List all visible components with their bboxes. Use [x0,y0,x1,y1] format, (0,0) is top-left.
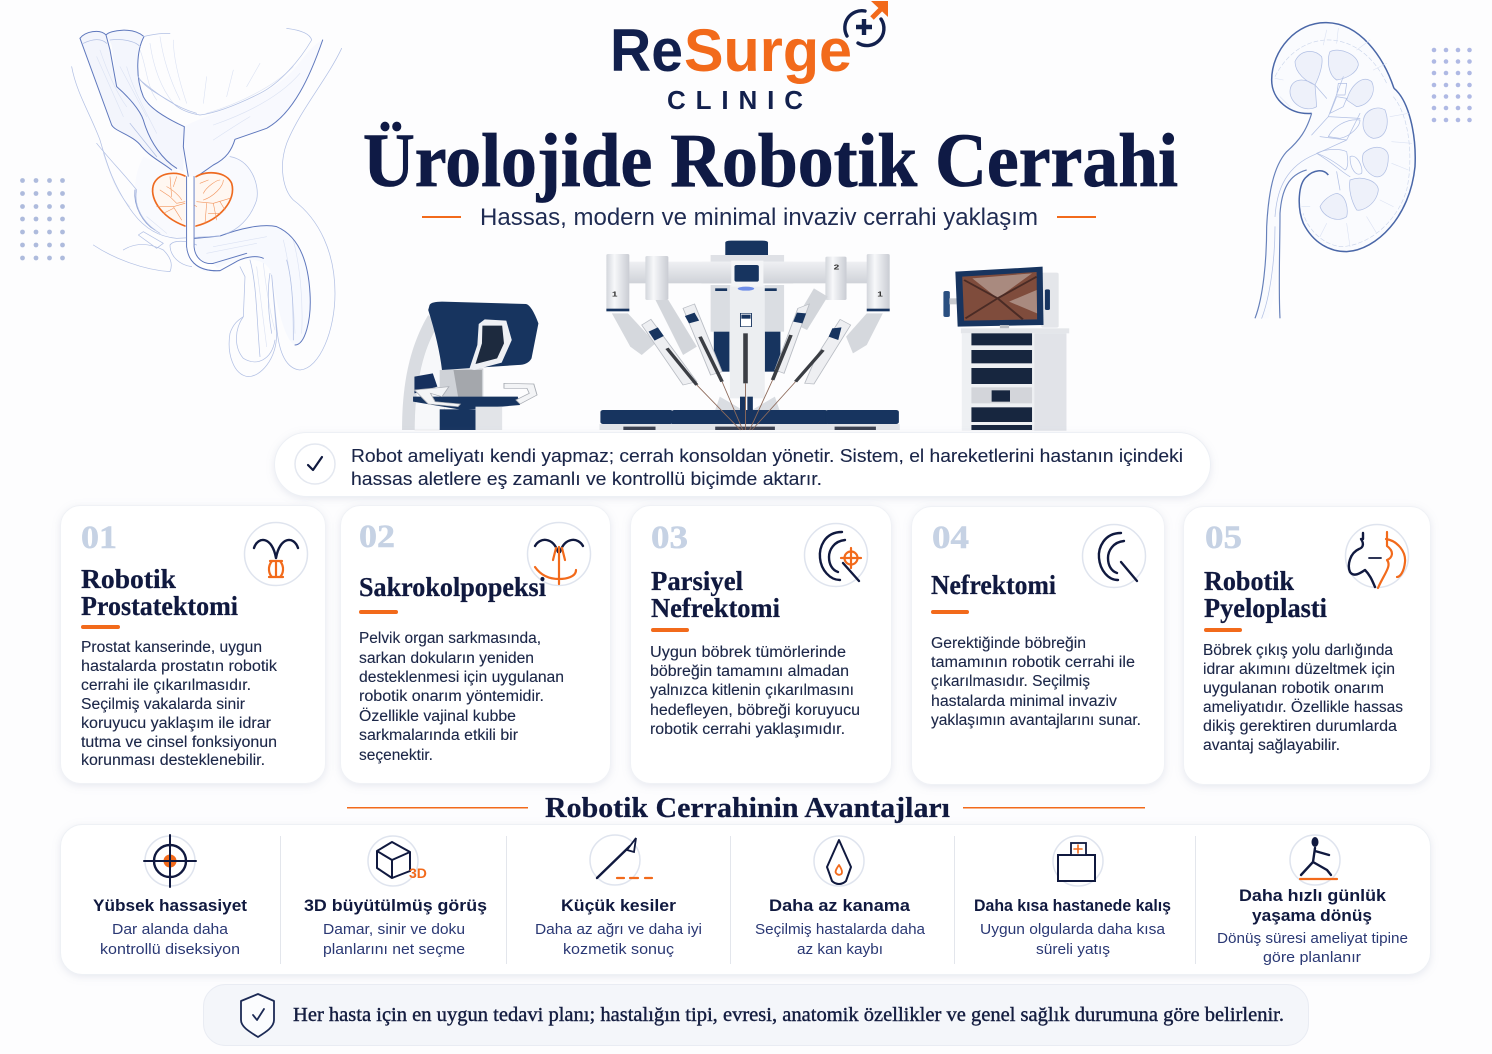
logo: ReSurge Clinic: CLINIC [667,85,803,115]
panel: card 02 Sakrokolpopeksi: sarkan dokuların yeniden [359,650,534,667]
panel: card 01 Robotik Prostatektomi: tutma ve cinsel fonksiyonun [81,734,277,751]
panel: card 05 Robotik Pyeloplasti: idrar akımını düzeltmek için [1203,661,1395,678]
footer callout: treatment plan: Her hasta için en uygun tedavi planı; hastalığın tipi, evresi, anatomik özellikler ve genel sağlık durumuna göre belirlenir. [293,1004,1284,1026]
panel: card 01 Robotik Prostatektomi: Robotik [81,564,176,594]
panel: card 05 Robotik Pyeloplasti: Pyeloplasti [1204,593,1327,623]
panel: card 04 Nefrektomi: Gerektiğinde böbreğin [931,635,1086,652]
panel: card 03 Parsiyel Nefrektomi: hedefleyen, böbreği koruyucu [650,702,860,719]
panel: card 05 Robotik Pyeloplasti: ameliyatıdır. Özellikle hassas [1203,698,1403,716]
advantage: 3D view: 3D büyütülmüş görüş [304,896,487,915]
panel: card 05 Robotik Pyeloplasti [1184,506,1430,784]
advantage: faster return to daily life: göre planlanır [1263,949,1361,966]
panel: card 04 Nefrektomi: hastalarda minimal invaziv [931,693,1117,710]
panel: card 03 Parsiyel Nefrektomi: Nefrektomi [651,593,780,623]
panel: card 03 Parsiyel Nefrektomi: yalnızca kitlenin çıkarılmasını [650,682,854,699]
title: Ürolojide Robotik Cerrahi [363,119,1178,203]
decoration: left dot grid [20,178,65,260]
advantage: faster return to daily life: Daha hızlı günlük [1239,886,1387,905]
panel: card 04 Nefrektomi: Nefrektomi [931,570,1056,600]
logo: ReSurge Clinic: Re [610,17,683,84]
advantage: faster return to daily life [1217,835,1408,966]
advantage: less bleeding: Daha az kanama [769,896,911,915]
panel: card 03 Parsiyel Nefrektomi: 03 [651,520,688,556]
heading: advantages: Robotik Cerrahinin Avantajları [545,792,950,824]
panel: card 03 Parsiyel Nefrektomi: Uygun böbrek tümörlerinde [650,644,846,661]
advantage: less bleeding: Seçilmiş hastalarda daha [755,921,926,938]
panel: card 01 Robotik Prostatektomi: Prostatektomi [81,591,238,621]
panel: card 05 Robotik Pyeloplasti: avantaj sağlayabilir. [1203,737,1340,754]
logo: ReSurge Clinic [610,1,888,115]
illustration: prostate anatomy [72,28,342,377]
advantage: shorter hospital stay: süreli yatış [1036,941,1110,958]
callout: surgeon controls the robot: Robot ameliyatı kendi yapmaz; cerrah konsoldan yönetir. Sistem, el hareketlerini hastanın içindeki [351,445,1183,466]
advantage: high precision: Yübsek hassasiyet [93,896,247,915]
callout: surgeon controls the robot [274,432,1210,496]
icon: kidney [1082,524,1146,588]
advantage: small incisions: kozmetik sonuç [563,941,675,958]
panel: card 05 Robotik Pyeloplasti: Robotik [1204,566,1294,596]
panel: card 01 Robotik Prostatektomi: Prostat kanserinde, uygun [81,639,262,656]
advantage: shorter hospital stay: Daha kısa hastanede kalış [974,896,1171,915]
icon: prostate [244,522,308,586]
icon: partial kidney target [804,524,868,586]
panel: card 02 Sakrokolpopeksi: seçenektir. [359,747,433,764]
decoration: right dot grid [1432,48,1472,122]
advantage: faster return to daily life: Dönüş süresi ameliyat tipine [1217,930,1408,947]
panel: card 01 Robotik Prostatektomi: cerrahi ile çıkarılmasıdır. [81,677,251,694]
illustration: kidney anatomy [1255,23,1415,318]
panel: card 02 Sakrokolpopeksi: sarkmalarında etkili bir [359,727,518,744]
panel: card 01 Robotik Prostatektomi: 01 [81,520,117,556]
panel: card 03 Parsiyel Nefrektomi: böbreğin tamamını almadan [650,663,849,680]
panel: card 05 Robotik Pyeloplasti: Böbrek çıkış yolu darlığında [1203,642,1393,659]
panel: card 02 Sakrokolpopeksi: Sakrokolpopeksi [359,572,546,602]
callout: surgeon controls the robot: hassas aletlere eş zamanlı ve kontrollü biçimde aktarır. [351,468,822,489]
robot: patient cart with arms: 1 [877,290,883,298]
advantage: high precision [93,835,247,958]
advantage: high precision: kontrollü diseksiyon [100,941,240,958]
panel: card 02 Sakrokolpopeksi [340,506,610,784]
panel: card 01 Robotik Prostatektomi: korunması desteklenebilir. [81,752,265,769]
advantage: small incisions: Daha az ağrı ve daha iyi [535,921,702,938]
icon: ureter repair [1346,524,1408,588]
logo: ReSurge Clinic: Surge [684,17,852,84]
robot: surgeon console [402,302,538,430]
robot: patient cart with arms: 2 [834,263,839,271]
advantage: shorter hospital stay [974,836,1171,958]
advantage: high precision: Dar alanda daha [112,921,229,938]
advantage: less bleeding [755,836,926,958]
advantage: small incisions: Küçük kesiler [561,896,676,915]
advantage: 3D view: 3D [409,865,427,881]
panel: card 04 Nefrektomi: 04 [932,520,969,556]
panel: card 04 Nefrektomi: tamamının robotik cerrahi ile [931,654,1135,671]
advantage: faster return to daily life: yaşama dönüş [1252,906,1372,925]
panel: card 02 Sakrokolpopeksi: desteklenmesi için uygulanan [359,669,564,686]
panel: card 01 Robotik Prostatektomi: Seçilmiş vakalarda sinir [81,696,245,713]
panel: card 03 Parsiyel Nefrektomi [630,506,892,784]
advantage: 3D view: planlarını net seçme [323,941,465,958]
advantage: shorter hospital stay: Uygun olgularda daha kısa [980,921,1166,938]
panel: card 01 Robotik Prostatektomi: koruyucu yaklaşım ile idrar [81,715,271,732]
panel: card 02 Sakrokolpopeksi: 02 [359,519,395,555]
footer callout: treatment plan [204,984,1308,1046]
panel: card 01 Robotik Prostatektomi [60,506,326,784]
advantage: 3D view [304,836,487,958]
panel: card 02 Sakrokolpopeksi: robotik onarım yöntemidir. [359,688,544,705]
panel: card 04 Nefrektomi: çıkarılmasıdır. Seçilmiş [931,673,1090,690]
panel: card 04 Nefrektomi [912,506,1164,784]
panel: card 04 Nefrektomi: yaklaşımın avantajlarını sunar. [931,712,1141,729]
icon: pelvic support [528,522,590,586]
panel: card 02 Sakrokolpopeksi: Özellikle vajinal kubbe [359,707,516,725]
panel: card 05 Robotik Pyeloplasti: 05 [1205,520,1242,556]
robot: patient cart with arms: 1 [612,290,618,298]
panel: advantages [60,824,1430,974]
subtitle: Hassas, modern ve minimal invaziv cerrahi yaklaşım [480,204,1038,231]
robot: patient cart with arms [599,241,900,430]
panel: card 05 Robotik Pyeloplasti: uygulanan robotik onarım [1203,680,1384,697]
panel: card 03 Parsiyel Nefrektomi: Parsiyel [651,566,743,596]
advantage: 3D view: Damar, sinir ve doku [323,921,465,938]
panel: card 02 Sakrokolpopeksi: Pelvik organ sarkmasında, [359,630,541,647]
panel: card 03 Parsiyel Nefrektomi: robotik cerrahi yaklaşımıdır. [650,721,845,738]
panel: card 01 Robotik Prostatektomi: hastalarda prostatın robotik [81,658,277,675]
advantage: less bleeding: az kan kaybı [797,941,883,958]
robot: vision cart with monitor [943,267,1069,431]
advantage: small incisions [535,835,702,958]
panel: card 05 Robotik Pyeloplasti: dikiş gerektiren durumlarda [1203,718,1397,735]
